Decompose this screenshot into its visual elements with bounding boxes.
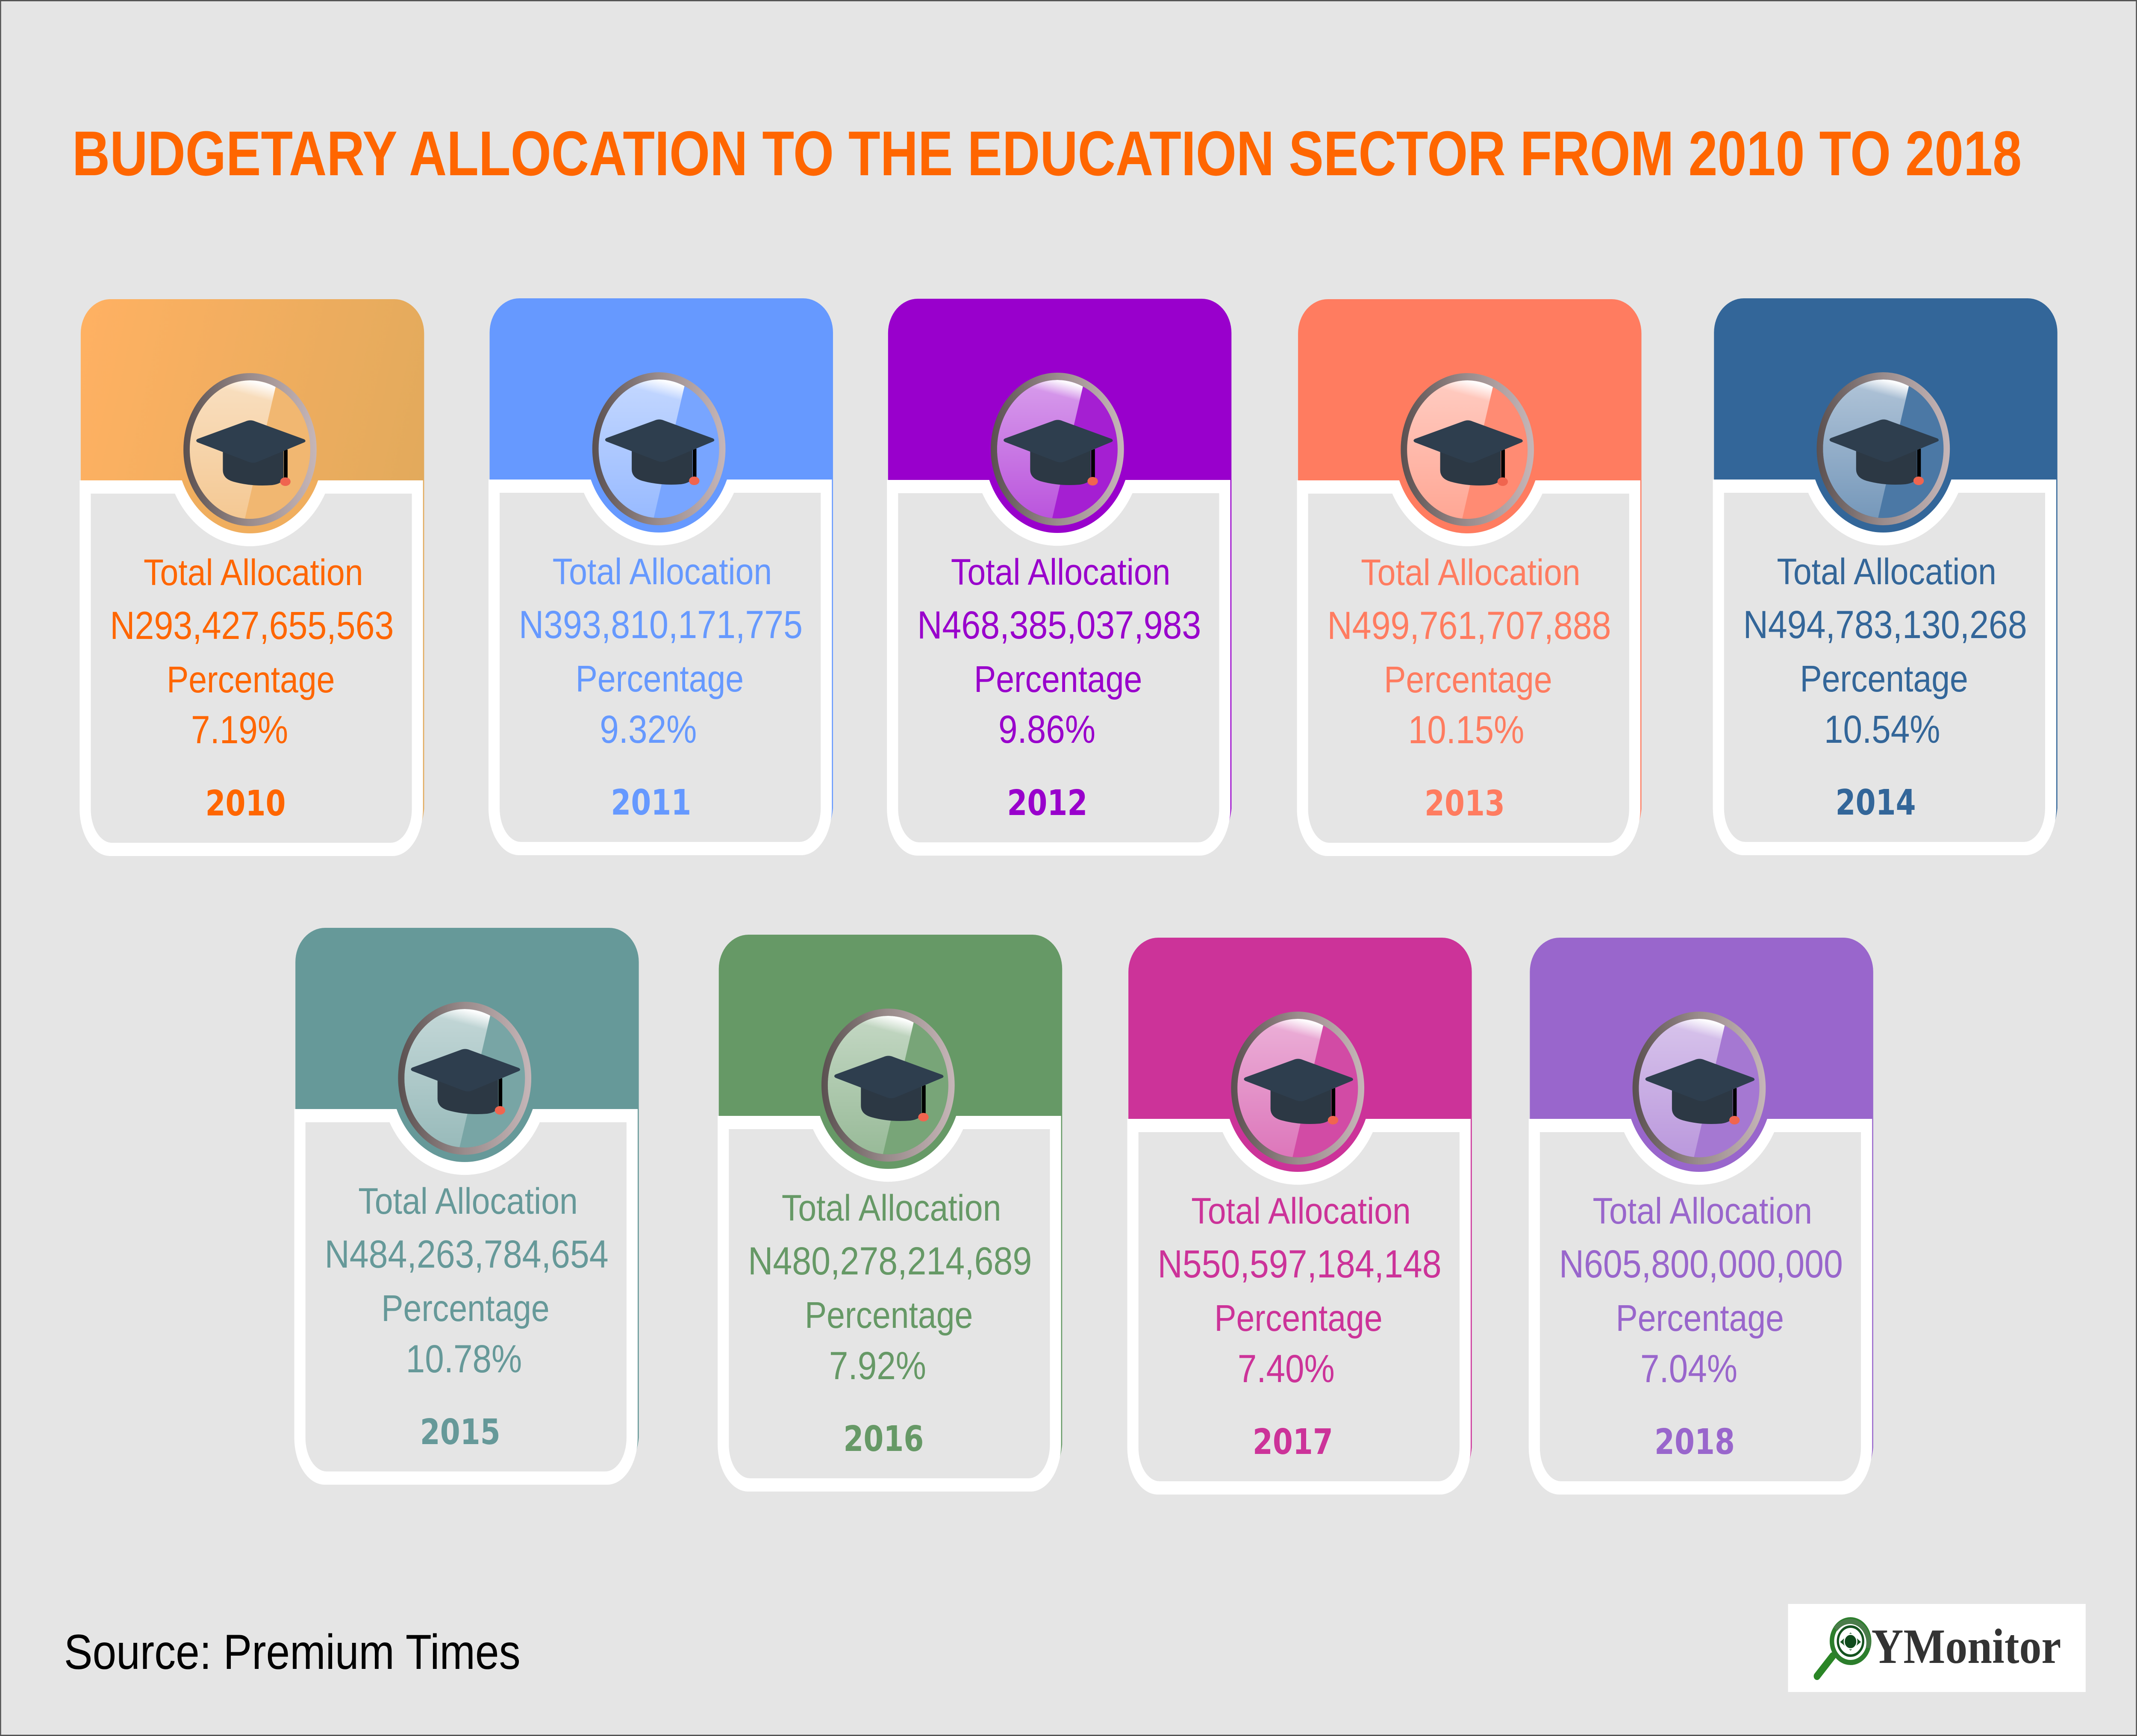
text block 2017: Percentage	[1214, 1298, 1383, 1339]
header panel 2013	[1298, 299, 1642, 844]
logo: YMonitor	[1788, 1604, 2086, 1692]
header panel 2017	[1128, 938, 1472, 1483]
card: 2018	[1529, 938, 1873, 1495]
card: 2010	[79, 299, 424, 856]
disk 2016	[820, 1116, 956, 1169]
text block 2012: 2012	[1007, 783, 1087, 824]
text block 2012	[917, 552, 1201, 824]
text block 2015: N484,263,784,654	[324, 1233, 609, 1276]
text block 2013: Percentage	[1384, 659, 1552, 700]
text block 2012: Total Allocation	[951, 552, 1171, 593]
text block 2013: N499,761,707,888	[1327, 604, 1611, 647]
text block 2016: N480,278,214,689	[748, 1239, 1032, 1283]
text block 2014: Percentage	[1800, 658, 1968, 700]
text block 2016	[748, 1188, 1032, 1459]
text block 2014: Total Allocation	[1777, 551, 1996, 592]
text block 2015: 10.78%	[406, 1337, 522, 1381]
frame 2015	[294, 1109, 638, 1485]
text block 2014: 10.54%	[1824, 708, 1940, 751]
header panel 2011	[490, 298, 833, 843]
header panel 2015	[295, 928, 639, 1473]
text block 2012: N468,385,037,983	[917, 603, 1201, 647]
disk 2015	[397, 1109, 533, 1162]
text block 2016: 2016	[843, 1419, 924, 1459]
text block 2018: Percentage	[1616, 1298, 1784, 1339]
text block 2010: 7.19%	[191, 708, 288, 752]
text block 2011: 9.32%	[600, 708, 697, 751]
text block 2015: Percentage	[381, 1288, 550, 1329]
text block 2018: 7.04%	[1640, 1347, 1737, 1391]
disk 2010	[182, 480, 318, 533]
frame 2016	[718, 1116, 1061, 1492]
header panel 2016	[719, 935, 1062, 1480]
icon: graduation cap 2012	[992, 374, 1122, 524]
icon: graduation cap 2018	[1634, 1013, 1764, 1163]
text block 2010: 2010	[206, 783, 286, 824]
icon: graduation cap 2010	[185, 375, 315, 524]
text block 2018: N605,800,000,000	[1559, 1242, 1843, 1286]
text block 2012: Percentage	[974, 659, 1142, 700]
text block 2018: Total Allocation	[1592, 1191, 1812, 1232]
header panel 2014	[1714, 298, 2058, 843]
frame 2010	[79, 480, 423, 856]
text block 2010	[110, 552, 394, 824]
text block 2011	[519, 551, 803, 823]
card: 2016	[718, 935, 1062, 1492]
frame 2018	[1529, 1119, 1872, 1495]
text block 2011: Total Allocation	[553, 551, 772, 592]
text block 2017	[1157, 1191, 1442, 1462]
card: 2011	[489, 298, 833, 855]
card: 2012	[887, 299, 1231, 856]
text block 2014	[1743, 551, 2027, 823]
disk 2014	[1815, 480, 1952, 533]
text block 2013: 2013	[1425, 783, 1505, 824]
text block 2018	[1559, 1191, 1843, 1462]
text block 2015: Total Allocation	[358, 1181, 578, 1222]
text block 2014: 2014	[1836, 783, 1916, 823]
title: BUDGETARY ALLOCATION TO THE EDUCATION SECTOR FROM 2010 TO 2018	[72, 118, 2022, 189]
text block 2015	[324, 1181, 609, 1453]
disk 2017	[1230, 1119, 1366, 1172]
header panel 2018	[1530, 938, 1873, 1483]
text block 2017: 7.40%	[1238, 1347, 1335, 1391]
icon: graduation cap 2017	[1233, 1013, 1363, 1163]
frame 2012	[887, 480, 1230, 856]
logo wordmark: YMonitor	[1871, 1619, 2061, 1674]
disk 2012	[989, 480, 1125, 533]
card: 2014	[1713, 298, 2058, 855]
text block 2016: Total Allocation	[782, 1188, 1001, 1229]
text block 2013: Total Allocation	[1361, 552, 1581, 593]
card: 2015	[294, 928, 639, 1485]
frame 2014	[1713, 480, 2056, 855]
icon: graduation cap 2015	[400, 1003, 530, 1153]
disk 2013	[1399, 480, 1535, 533]
text block 2017: N550,597,184,148	[1157, 1242, 1442, 1286]
text block 2016: Percentage	[805, 1295, 973, 1336]
text block 2011: 2011	[611, 783, 691, 823]
text block 2013	[1327, 552, 1611, 824]
text block 2011: Percentage	[576, 658, 744, 700]
text block 2010: Percentage	[167, 659, 335, 700]
header panel 2010	[81, 299, 424, 844]
source note: Source: Premium Times	[64, 1624, 521, 1680]
header panel 2012	[888, 299, 1231, 844]
text block 2011: N393,810,171,775	[519, 603, 803, 647]
text block 2018: 2018	[1654, 1422, 1735, 1462]
icon: graduation cap 2013	[1402, 375, 1532, 524]
text block 2016: 7.92%	[829, 1344, 926, 1388]
text block 2013: 10.15%	[1408, 708, 1524, 752]
frame 2011	[489, 480, 832, 855]
text block 2012: 9.86%	[998, 708, 1095, 751]
text block 2014: N494,783,130,268	[1743, 603, 2027, 647]
card: 2017	[1127, 938, 1472, 1495]
text block 2017: 2017	[1253, 1422, 1333, 1462]
card: 2013	[1297, 299, 1642, 856]
frame 2013	[1297, 480, 1640, 856]
text block 2017: Total Allocation	[1191, 1191, 1411, 1232]
icon: graduation cap 2016	[823, 1010, 953, 1160]
icon: graduation cap 2014	[1818, 374, 1949, 524]
icon: magnifier with eye	[1817, 1620, 1869, 1676]
disk 2018	[1631, 1119, 1767, 1172]
text block 2010: N293,427,655,563	[110, 604, 394, 647]
icon: graduation cap 2011	[594, 374, 724, 524]
disk 2011	[591, 480, 727, 533]
text block 2015: 2015	[420, 1412, 500, 1453]
text block 2010: Total Allocation	[144, 552, 363, 593]
frame 2017	[1127, 1119, 1471, 1495]
